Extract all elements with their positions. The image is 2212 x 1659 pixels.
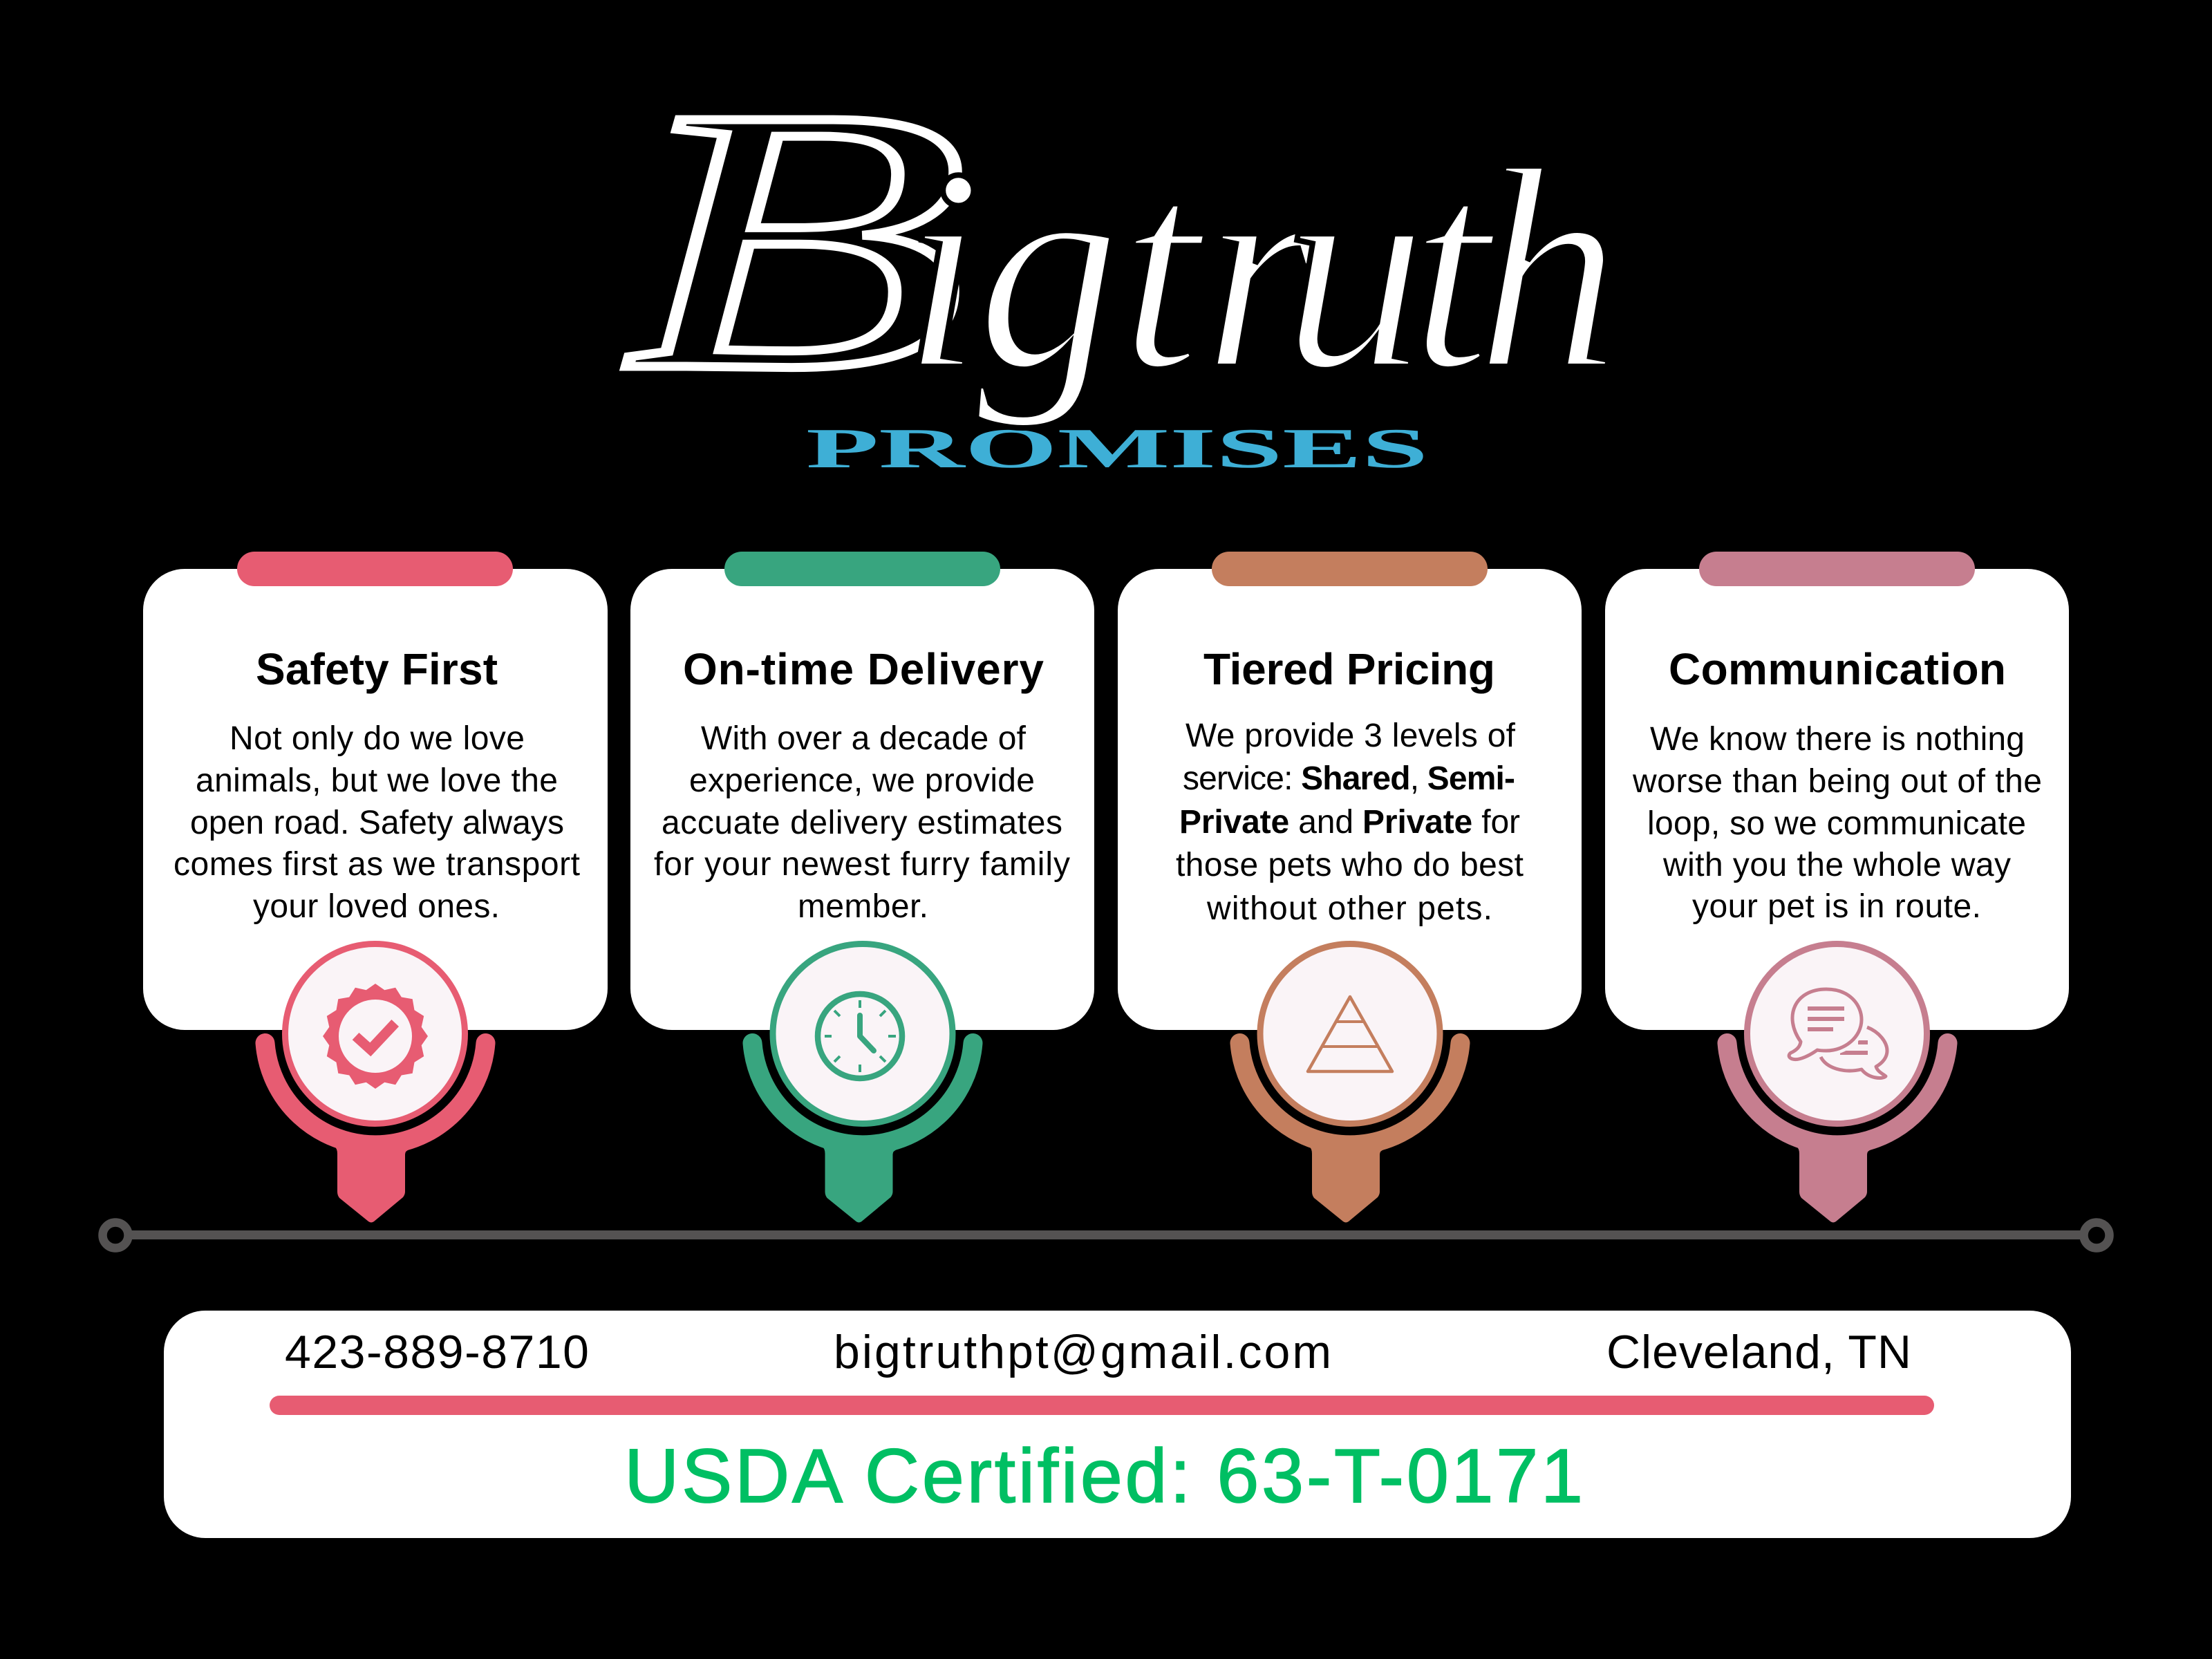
certification: USDA Certified: 63-T-0171 bbox=[624, 1434, 1583, 1519]
icon: clock bbox=[818, 994, 902, 1078]
icon: chat bubbles bbox=[1789, 989, 1887, 1078]
body text: Communication: your pet is in route. bbox=[1692, 888, 1981, 925]
body text: Communication: We know there is nothing bbox=[1650, 721, 2025, 758]
heading: Safety First: Safety First bbox=[256, 644, 498, 694]
body text: Safety First: Not only do we love bbox=[229, 720, 525, 757]
body text: Tiered Pricing: those pets who do best bbox=[1176, 847, 1524, 883]
body text: Communication: worse than being out of the bbox=[1632, 763, 2042, 800]
timeline line with end rings bbox=[102, 1222, 2110, 1248]
icon: seal with check mark bbox=[323, 984, 428, 1089]
pin: Communication marker bbox=[1727, 944, 1948, 1222]
body text: Safety First bbox=[174, 720, 580, 925]
body text: On-time Delivery: for your newest furry family bbox=[654, 846, 1070, 883]
body text: Tiered Pricing: We provide 3 levels of bbox=[1185, 718, 1516, 754]
panel: On-time Delivery bbox=[630, 552, 1094, 1030]
heading: Communication: Communication bbox=[1669, 644, 2006, 694]
heading: On-time Delivery: On-time Delivery bbox=[683, 644, 1044, 694]
body text: Communication bbox=[1632, 721, 2042, 925]
body text: On-time Delivery: accuate delivery estimates bbox=[662, 805, 1062, 841]
body text: On-time Delivery: member. bbox=[798, 888, 928, 925]
pin: On-time Delivery marker bbox=[752, 944, 973, 1222]
panel: Communication bbox=[1605, 552, 2069, 1030]
body text: Safety First: open road. Safety always bbox=[190, 805, 564, 841]
body text: Safety First: your loved ones. bbox=[253, 888, 500, 925]
body text: Communication: with you the whole way bbox=[1662, 847, 2011, 883]
body text: Communication: loop, so we communicate bbox=[1647, 805, 2026, 842]
body text: Safety First: comes first as we transport bbox=[174, 846, 580, 883]
body text: On-time Delivery: With over a decade of bbox=[701, 720, 1027, 757]
panel: Safety First bbox=[143, 552, 608, 1030]
divider bar bbox=[270, 1396, 1934, 1415]
body text: On-time Delivery: experience, we provide bbox=[689, 762, 1035, 799]
body text: Tiered Pricing: Private and Private for bbox=[1179, 804, 1520, 841]
body text: Tiered Pricing: without other pets. bbox=[1206, 890, 1492, 927]
pin: Tiered Pricing marker bbox=[1240, 944, 1460, 1222]
contact: email: bigtruthpt@gmail.com bbox=[834, 1326, 1331, 1378]
body text: Tiered Pricing bbox=[1176, 718, 1524, 927]
contact: phone: 423-889-8710 bbox=[285, 1326, 589, 1378]
panel: contact footer bbox=[164, 1311, 2071, 1538]
body text: On-time Delivery bbox=[654, 720, 1070, 925]
subtitle: PROMISES: PROMISES bbox=[806, 417, 1428, 480]
heading: Tiered Pricing: Tiered Pricing bbox=[1203, 644, 1495, 694]
title: Bigtruth script logotype: Bigtruth bbox=[622, 30, 1620, 448]
pin: Safety First marker bbox=[265, 944, 485, 1222]
body text: Safety First: animals, but we love the bbox=[196, 762, 558, 799]
icon: pyramid bbox=[1308, 997, 1392, 1071]
body text: Tiered Pricing: service: Shared, Semi- bbox=[1183, 760, 1515, 797]
panel: Tiered Pricing bbox=[1118, 552, 1582, 1030]
contact: location: Cleveland, TN bbox=[1606, 1326, 1911, 1378]
